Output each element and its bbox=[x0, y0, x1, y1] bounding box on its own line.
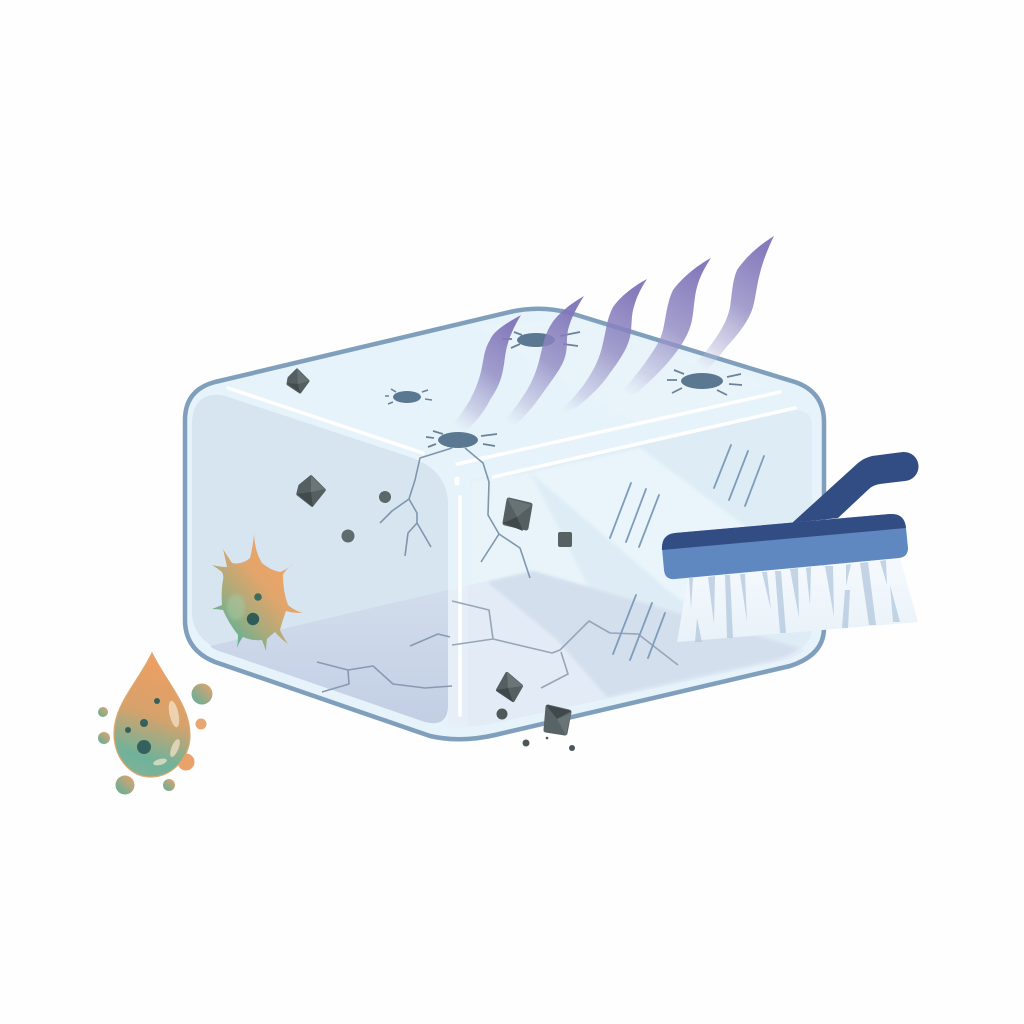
plume 5 bbox=[685, 236, 774, 375]
debris: rock left bbox=[297, 476, 325, 507]
icon: scrub brush bbox=[662, 452, 919, 642]
left face bbox=[192, 395, 448, 723]
droplet body bbox=[114, 653, 190, 777]
droplet satellite dots bbox=[98, 684, 212, 794]
debris: round particle bbox=[342, 530, 354, 542]
cracks bbox=[317, 448, 678, 692]
floor lighter pillar bbox=[448, 586, 468, 728]
droplet spots bbox=[125, 698, 160, 754]
plume 1 bbox=[446, 315, 521, 433]
debris: rock floor bbox=[496, 672, 523, 702]
mold colony bbox=[212, 534, 303, 651]
light bands on right face bbox=[470, 448, 790, 600]
brush head dark top bbox=[662, 514, 906, 550]
debris: falling dots bbox=[522, 737, 575, 751]
droplet highlights bbox=[152, 700, 182, 767]
brush handle bbox=[792, 452, 919, 523]
top face highlight bbox=[477, 318, 770, 425]
plume 3 bbox=[551, 279, 647, 420]
panel: glass block bbox=[185, 309, 824, 751]
pore: back top bbox=[502, 332, 580, 348]
block outline and glass body bbox=[185, 309, 824, 739]
droplet bump bbox=[178, 754, 194, 770]
debris: rock centre bbox=[503, 498, 532, 531]
floor: left bbox=[210, 590, 448, 723]
debris inside block bbox=[287, 369, 575, 751]
debris: rock at bottom edge bbox=[546, 705, 571, 735]
white edge highlights bbox=[228, 388, 795, 715]
floor: right bbox=[448, 571, 805, 727]
pore: left top bbox=[385, 389, 432, 404]
pores bbox=[385, 332, 742, 448]
floor shaded band bbox=[487, 571, 800, 697]
icon: contaminated droplet bbox=[98, 653, 212, 794]
pore: front corner bbox=[426, 431, 497, 448]
steam plumes bbox=[446, 236, 774, 433]
pore: right top bbox=[667, 370, 742, 395]
plume 2 bbox=[496, 296, 584, 430]
plume 4 bbox=[611, 258, 711, 402]
debris: small square rock bbox=[560, 534, 570, 545]
scratches bbox=[610, 445, 764, 660]
debris: small rock bbox=[379, 491, 391, 503]
brush head bbox=[662, 514, 908, 579]
right face bbox=[470, 410, 812, 725]
debris: floor particle bbox=[496, 708, 508, 720]
debris: rock top bbox=[287, 369, 309, 393]
brush bristles bbox=[677, 558, 918, 642]
